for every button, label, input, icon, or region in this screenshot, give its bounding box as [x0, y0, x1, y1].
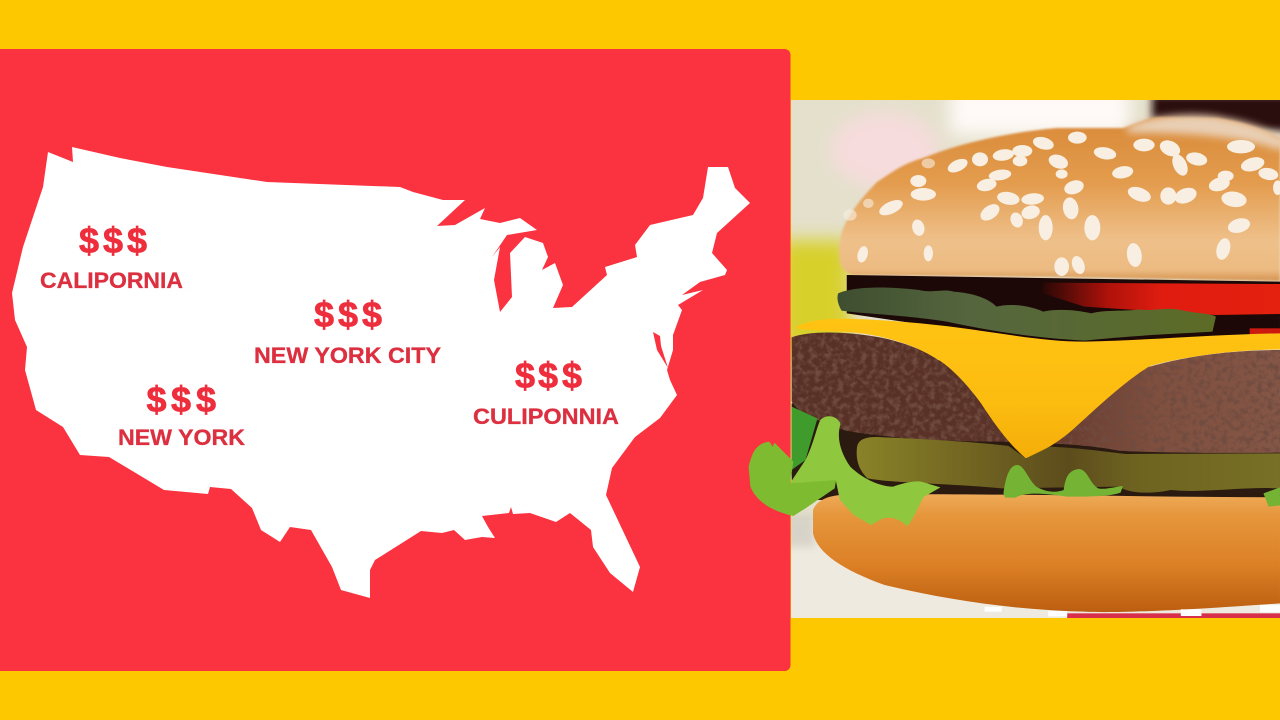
lower pickles — [857, 437, 1280, 493]
photo: hamburger — [780, 85, 1280, 618]
upper pickle — [837, 288, 1216, 341]
label: California right: $$$ — [515, 355, 582, 396]
label: California right: CULIPONNIA — [473, 404, 619, 429]
top bun — [839, 115, 1280, 281]
label: California top left — [40, 220, 183, 293]
cheese slice — [795, 319, 1280, 458]
label: New York: NEW YORK — [118, 425, 245, 450]
dark under patty — [792, 403, 1280, 500]
bottom bun — [813, 494, 1280, 612]
lettuce overlapping panel — [749, 407, 1280, 526]
right ruffle — [1263, 487, 1280, 507]
label: California top left: CALIPORNIA — [40, 268, 183, 293]
photo backdrop — [780, 85, 1280, 618]
label: California top left: $$$ — [79, 220, 147, 261]
burger middle layers — [792, 275, 1280, 618]
label: California right — [473, 355, 619, 429]
label: New York: $$$ — [146, 379, 216, 420]
label: New York City: NEW YORK CITY — [254, 343, 441, 368]
red panel — [0, 49, 790, 671]
back lettuce — [792, 407, 817, 470]
main leaf — [790, 416, 940, 526]
label: New York — [118, 379, 245, 450]
plate details — [985, 605, 1280, 618]
label: New York City — [254, 294, 441, 368]
map of the United States — [12, 147, 750, 598]
patty — [792, 333, 1280, 453]
label: New York City: $$$ — [314, 294, 382, 335]
dark gap and tomato — [847, 275, 1280, 343]
small ruffle — [1003, 465, 1123, 498]
left leaf — [749, 442, 836, 516]
sesame seeds — [843, 132, 1280, 276]
